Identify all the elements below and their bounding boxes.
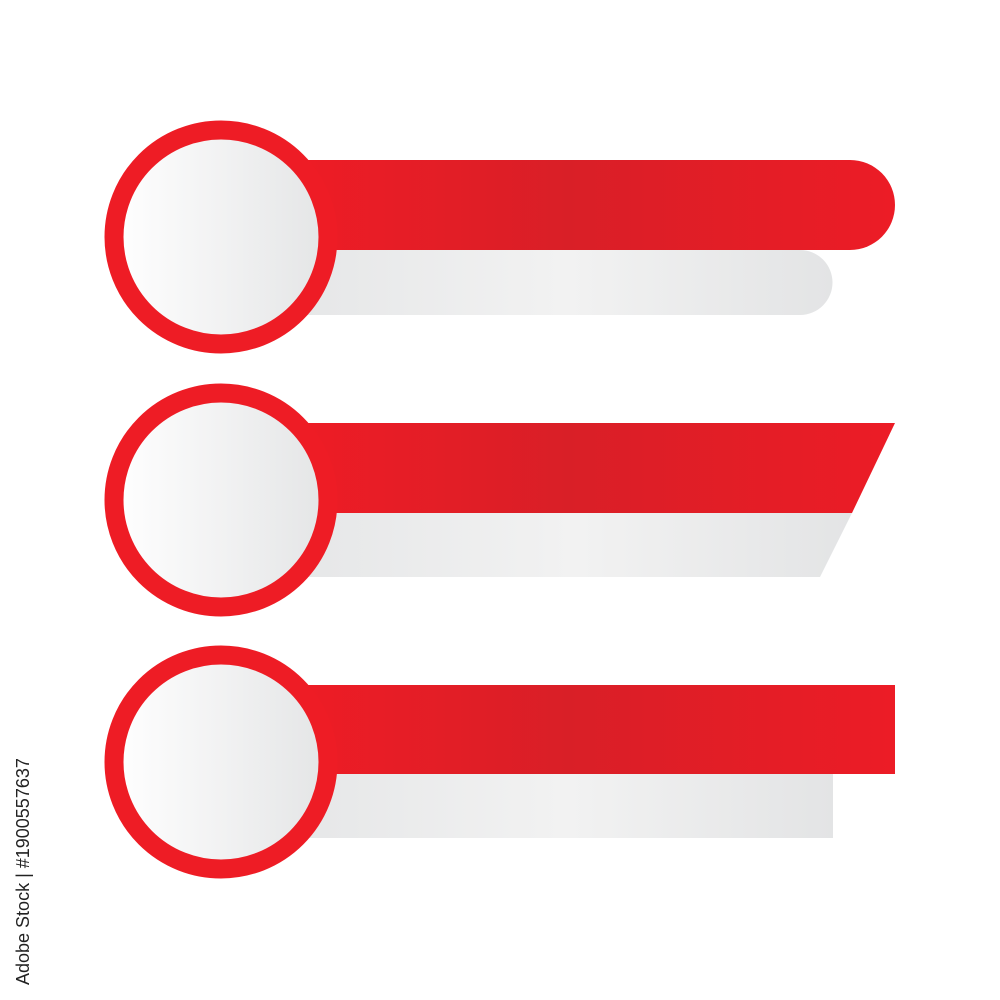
row 2: slanted banner — [114, 393, 895, 607]
row 3: square banner — [114, 655, 895, 869]
vertical credit text: Adobe Stock | #1900557637 — [13, 758, 33, 985]
row 1: rounded banner — [114, 130, 895, 344]
